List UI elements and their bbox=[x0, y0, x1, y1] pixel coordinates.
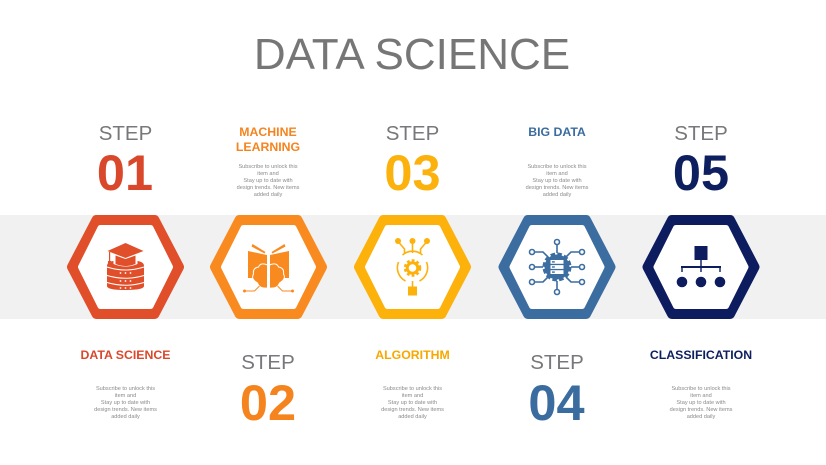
icon: algorithm gear bbox=[395, 238, 430, 296]
step 2 text: MACHINE bbox=[239, 125, 297, 139]
step 3 text: ALGORITHM bbox=[375, 348, 450, 362]
icon: book and brain bbox=[243, 244, 294, 292]
step 5 heading: 05 bbox=[673, 144, 729, 201]
step 4 text bbox=[526, 125, 589, 198]
step 2 text: added daily bbox=[254, 192, 283, 198]
step 3 heading: 03 bbox=[384, 144, 441, 201]
step 2 text: Stay up to date with bbox=[243, 178, 293, 184]
step 4 text: Subscribe to unlock this bbox=[527, 164, 587, 170]
step 2 heading: STEP bbox=[241, 351, 295, 374]
step 3 text: design trends. New items bbox=[381, 407, 444, 413]
step 2 text: Subscribe to unlock this bbox=[238, 164, 298, 170]
step 4 text: BIG DATA bbox=[528, 125, 586, 139]
step 5 text: Subscribe to unlock this bbox=[671, 386, 731, 392]
step 5 hexagon bbox=[648, 220, 754, 314]
icon: classification tree bbox=[677, 246, 725, 287]
step 2 heading: 02 bbox=[240, 374, 296, 431]
step 4 text: item and bbox=[546, 171, 568, 177]
step 5 heading: STEP bbox=[674, 122, 728, 145]
step 5 text: added daily bbox=[687, 414, 716, 420]
step 4 text: Stay up to date with bbox=[532, 178, 582, 184]
step 2 hexagon bbox=[215, 220, 322, 314]
icon: graduation cap on database bbox=[107, 243, 144, 290]
step 1 text: DATA SCIENCE bbox=[81, 348, 170, 362]
background band bbox=[0, 215, 826, 319]
step 2 text: design trends. New items bbox=[237, 185, 300, 191]
icon: big data gear bbox=[530, 240, 584, 294]
step 5 text bbox=[650, 348, 752, 420]
step 3 text: Stay up to date with bbox=[388, 400, 437, 406]
step 4 heading: 04 bbox=[528, 374, 585, 431]
step 2 text bbox=[236, 125, 300, 198]
step 4 text: added daily bbox=[543, 192, 572, 198]
step 1 hexagon bbox=[72, 220, 179, 314]
step 1 text: Stay up to date with bbox=[101, 400, 150, 406]
step 1 text: design trends. New items bbox=[94, 407, 157, 413]
step 4 hexagon bbox=[504, 220, 610, 314]
step 1 heading: STEP bbox=[99, 122, 152, 145]
step 1 text: Subscribe to unlock this bbox=[96, 386, 155, 392]
step 3 hexagon bbox=[359, 220, 466, 314]
step 3 text: Subscribe to unlock this bbox=[383, 386, 442, 392]
step 5 text: Stay up to date with bbox=[676, 400, 726, 406]
title: DATA SCIENCE bbox=[254, 30, 570, 79]
step 3 text: added daily bbox=[398, 414, 427, 420]
step 1 text bbox=[81, 348, 170, 420]
step 3 heading: STEP bbox=[386, 122, 439, 145]
step 2 text: item and bbox=[257, 171, 279, 177]
step 3 text: item and bbox=[402, 393, 423, 399]
step 1 text: added daily bbox=[111, 414, 140, 420]
step 5 text: design trends. New items bbox=[670, 407, 733, 413]
step 1 heading: 01 bbox=[97, 144, 153, 201]
step 4 text: design trends. New items bbox=[526, 185, 589, 191]
step 3 text bbox=[375, 348, 450, 420]
step 1 text: item and bbox=[115, 393, 136, 399]
step 5 text: CLASSIFICATION bbox=[650, 348, 752, 362]
step 5 text: item and bbox=[690, 393, 712, 399]
step 2 text: LEARNING bbox=[236, 140, 300, 154]
step 4 heading: STEP bbox=[530, 351, 584, 374]
